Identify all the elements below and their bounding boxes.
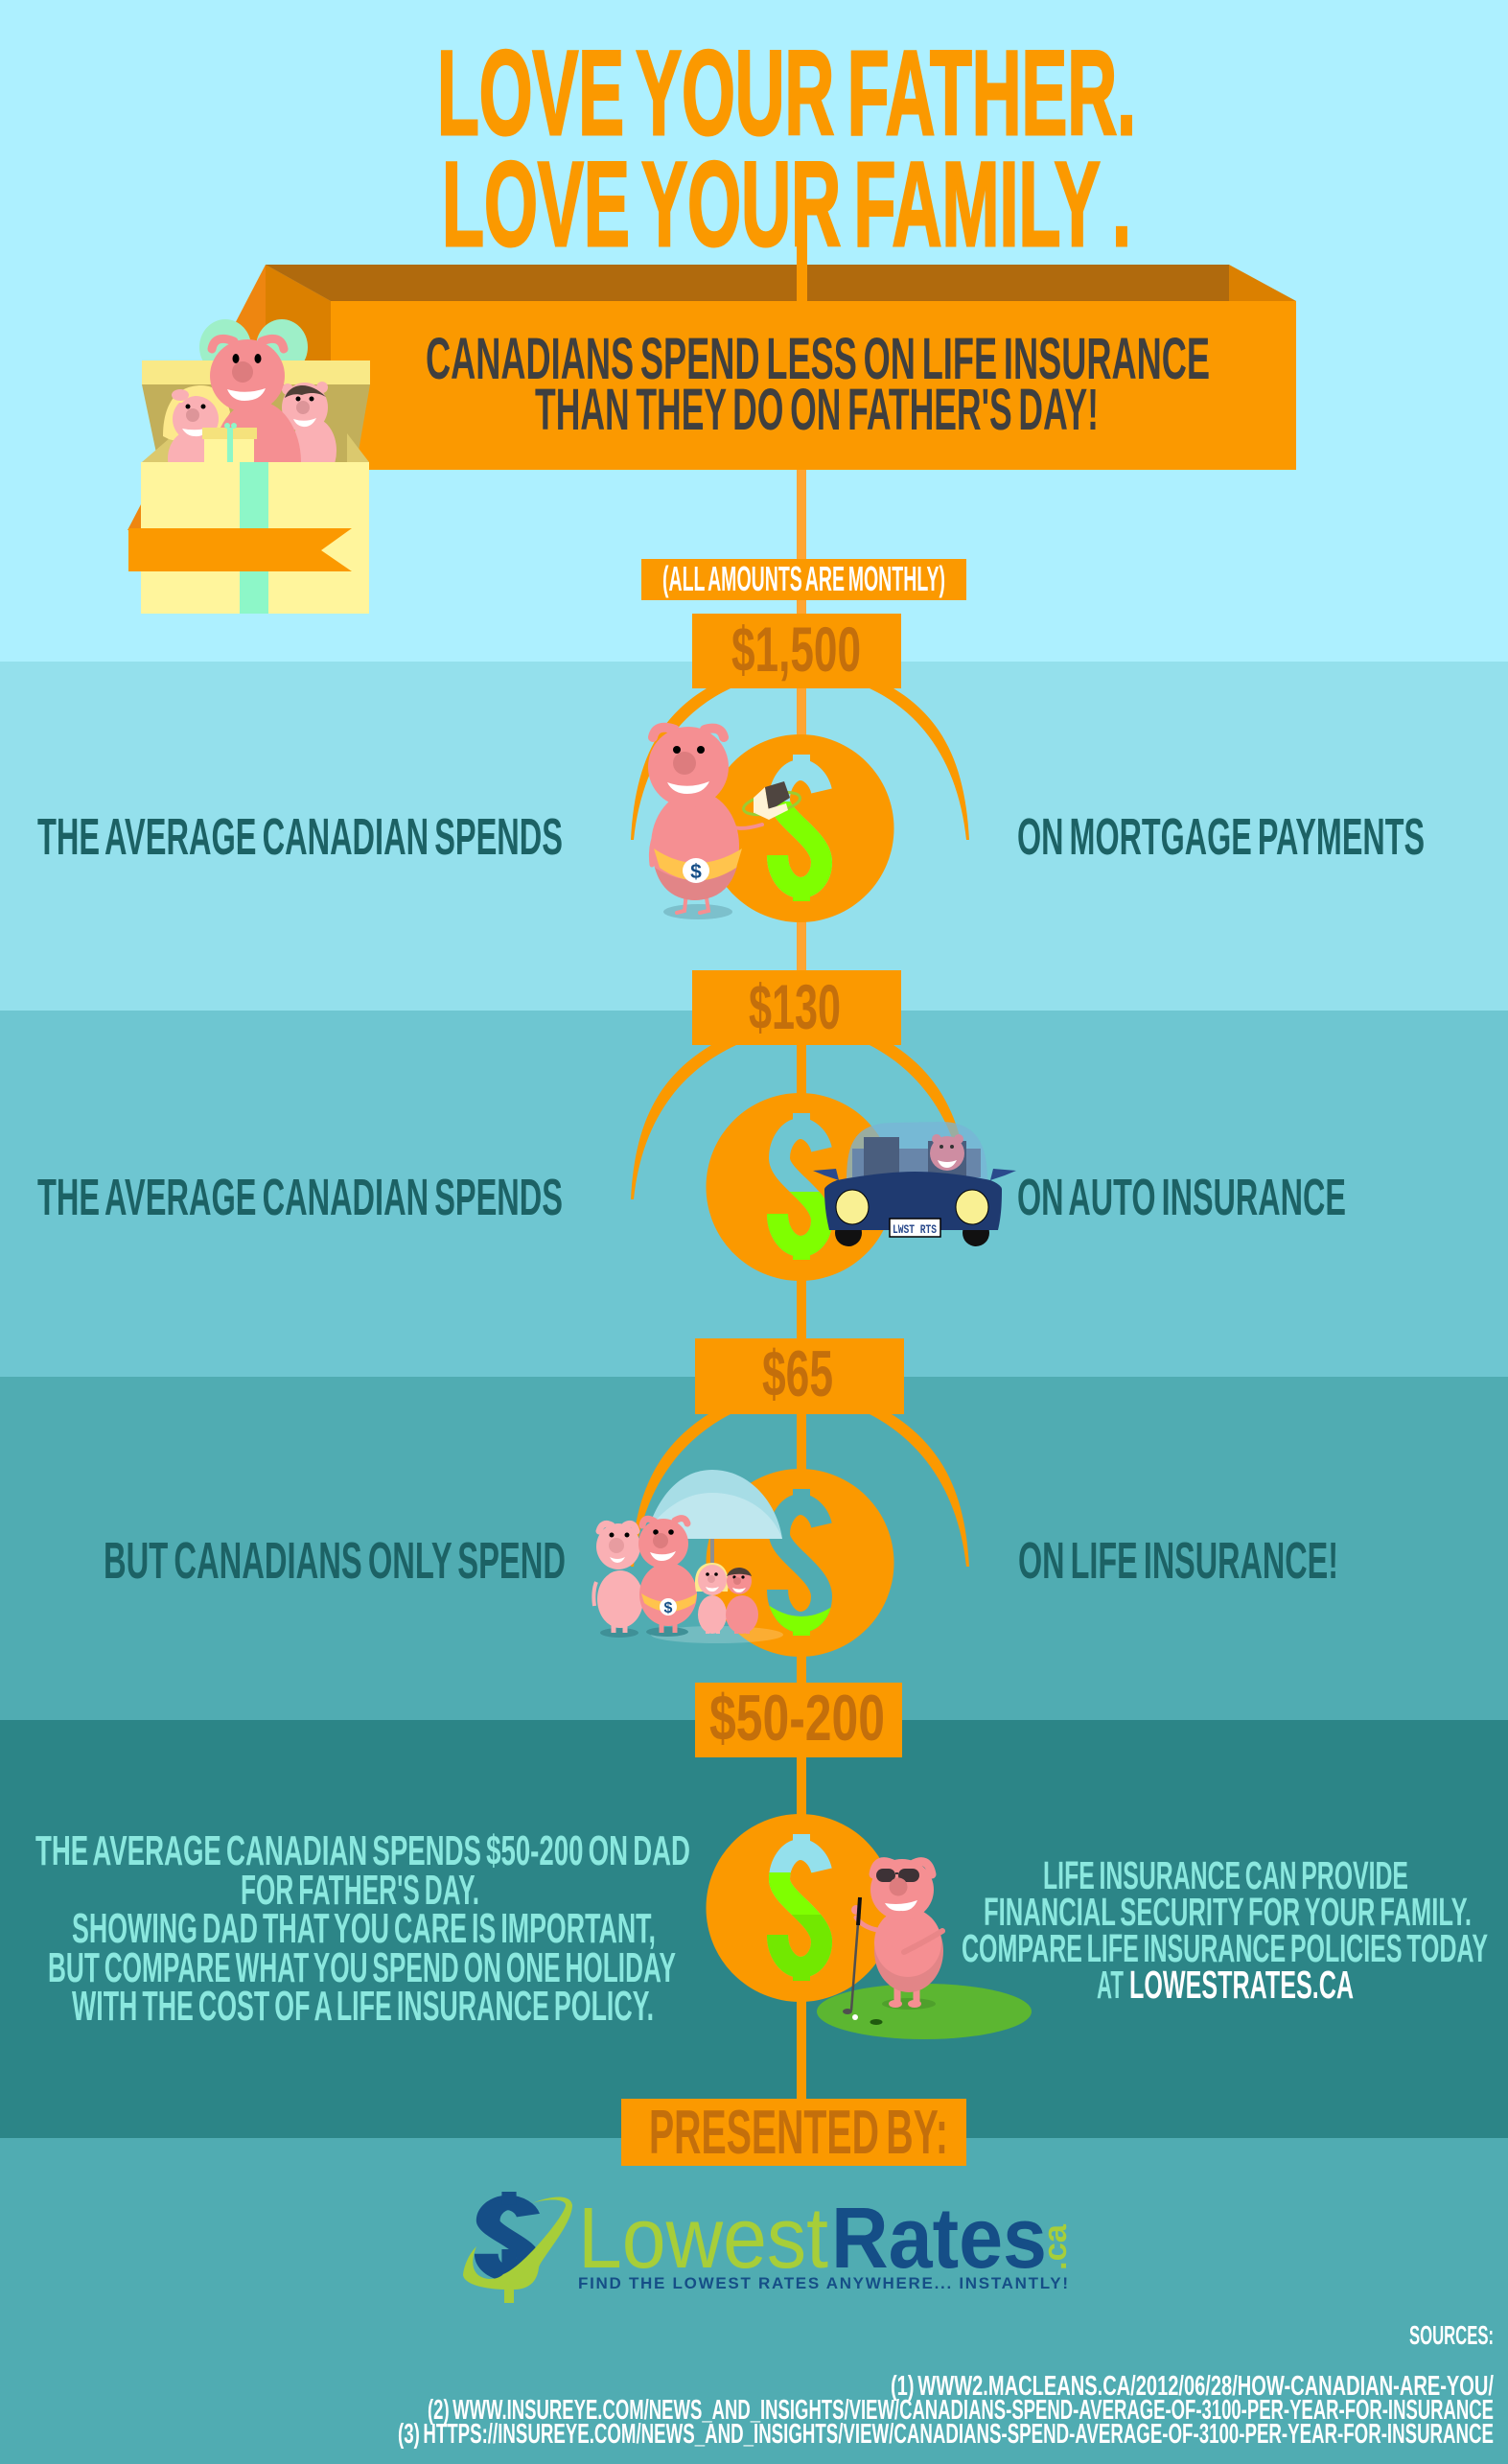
label: presented by: [621, 2097, 966, 2167]
timeline pole: [797, 470, 806, 2100]
father pig: [638, 1519, 697, 1637]
label: $50-200: $50-200: [709, 1682, 885, 1755]
text: life insurance call to action: AT: [1097, 1963, 1124, 2007]
arcs around mortgage coin: [631, 688, 969, 840]
logo: LowestRates.ca: .ca: [1037, 2223, 1074, 2270]
illustration: pig driving car: LWST RTS: [893, 1222, 937, 1237]
arcs around life insurance coin: [631, 1414, 969, 1567]
text: father's day explanation: [35, 1827, 690, 2030]
logo: LowestRates.ca: [463, 2191, 1074, 2303]
label: $1,500: $1,500: [731, 614, 861, 685]
coin: auto: [706, 1093, 893, 1281]
band: life insurance section: [0, 1377, 1508, 1720]
illustration: gift box with pig family: [128, 319, 370, 614]
girl pig: [695, 1563, 729, 1634]
text: life insurance call to action: [962, 1853, 1488, 2007]
text: average canadian spends (mortgage): THE AVERAGE CANADIAN SPENDS: [37, 808, 563, 866]
label: $130: [692, 970, 901, 1045]
illustration: golfing pig: [817, 1859, 1032, 2039]
title: [437, 27, 1136, 271]
small gift: [204, 437, 254, 464]
open box banner: [128, 212, 1296, 530]
father pig: $: [664, 1600, 673, 1616]
mother pig: [593, 1523, 643, 1638]
label: $65: [695, 1337, 904, 1414]
arcs around auto coin: [631, 1045, 969, 1199]
band: father's day section: [0, 1720, 1508, 2138]
text: father's day explanation: WITH THE COST OF A LIFE INSURANCE POLICY.: [72, 1983, 654, 2030]
logo: LowestRates.ca: FIND THE LOWEST RATES ANYWHERE... INSTANTLY!: [578, 2274, 1068, 2292]
illustration: pig family under umbrella: [593, 1470, 783, 1643]
subtitle: THAN THEY DO ON FATHER'S DAY!: [535, 377, 1099, 442]
box front: [141, 462, 369, 614]
coin: mortgage: [706, 734, 893, 922]
logo: LowestRates.ca: Rates: [831, 2191, 1047, 2287]
text: but canadians only spend: BUT CANADIANS ONLY SPEND: [104, 1532, 566, 1590]
coin: father's day: [706, 1814, 893, 2002]
logo: LowestRates.ca: Lowest: [578, 2191, 828, 2287]
text: life insurance call to action: LOWESTRATES.CA: [1129, 1963, 1354, 2007]
text: father's day explanation: FOR FATHER'S DAY.: [241, 1867, 479, 1914]
text: father's day explanation: THE AVERAGE CANADIAN SPENDS $50-200 ON DAD: [35, 1827, 690, 1874]
label: $130: $130: [749, 971, 841, 1042]
lid: [142, 360, 370, 384]
text: average canadian spends (auto): THE AVERAGE CANADIAN SPENDS: [37, 1169, 563, 1226]
note: all amounts are monthly: (ALL AMOUNTS ARE MONTHLY): [662, 559, 945, 598]
girl pig: [163, 334, 336, 462]
band: footer section: [0, 2138, 1508, 2464]
illustration: pig holding house: $: [690, 861, 702, 883]
subtitle: [426, 326, 1210, 442]
coin: life insurance: [706, 1469, 893, 1657]
label: presented by: PRESENTED BY:: [649, 2097, 948, 2167]
logo icon: dollar and swoosh: [463, 2192, 572, 2303]
ribbon banner: [128, 528, 352, 571]
band: sky background: [0, 0, 1508, 662]
big pig: [220, 405, 301, 462]
text: father's day explanation: BUT COMPARE WHAT YOU SPEND ON ONE HOLIDAY: [48, 1944, 676, 1991]
label: $65: $65: [762, 1337, 833, 1410]
label: $1,500: [692, 614, 901, 688]
boy pig: [295, 422, 336, 462]
lid interior: [142, 384, 370, 462]
note: all amounts are monthly: [641, 559, 966, 600]
sources: [398, 2320, 1494, 2450]
boy pig: [726, 1568, 758, 1634]
band: mortgage section: [0, 662, 1508, 1011]
house: [742, 788, 801, 819]
illustration: pig holding house: [648, 727, 801, 919]
band: auto insurance section: [0, 1011, 1508, 1377]
bow loops: [199, 319, 308, 375]
illustration: pig driving car: [813, 1122, 1016, 1246]
text: father's day explanation: SHOWING DAD THAT YOU CARE IS IMPORTANT,: [72, 1905, 656, 1952]
